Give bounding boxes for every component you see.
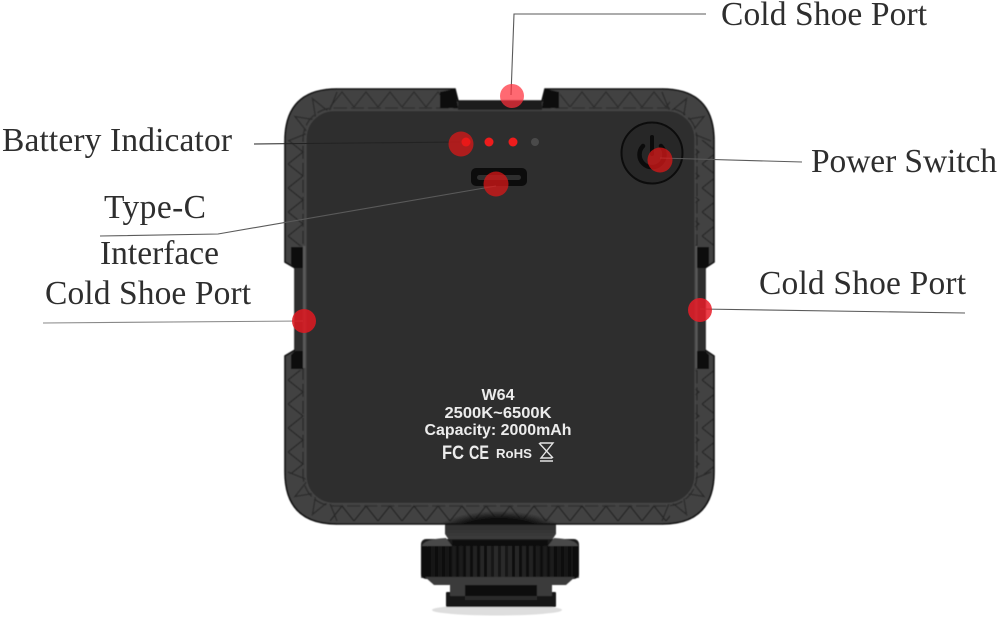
printed specs: FC xyxy=(442,443,464,464)
rim texture xyxy=(287,91,713,523)
Type-C socket xyxy=(471,168,527,186)
leader line: power switch xyxy=(660,158,802,162)
leader line: right cold shoe xyxy=(700,309,965,313)
leader line: battery indicator xyxy=(254,142,460,144)
label: left cold shoe: Cold Shoe Port xyxy=(45,275,252,312)
label: right cold shoe: Cold Shoe Port xyxy=(759,265,967,302)
power button xyxy=(622,122,682,184)
marker: battery indicator xyxy=(448,132,474,156)
marker: Type-C xyxy=(484,172,508,196)
leader line: top cold shoe xyxy=(511,14,706,95)
light body xyxy=(285,89,714,616)
printed specs: Capacity: 2000mAh xyxy=(424,422,572,439)
marker: top cold shoe xyxy=(500,84,524,108)
label: Type-C: Type-C xyxy=(104,189,206,226)
mount shadow xyxy=(444,512,554,524)
main back panel xyxy=(306,110,695,504)
marker: right cold shoe xyxy=(688,298,712,322)
label: Interface: Interface xyxy=(100,235,219,272)
label: power switch: Power Switch xyxy=(811,143,997,180)
leader line: left cold shoe xyxy=(43,321,303,323)
leader line: Type-C xyxy=(100,186,496,236)
marker: left cold shoe xyxy=(292,309,316,333)
hot shoe mount xyxy=(421,522,579,616)
rubber housing xyxy=(285,89,714,524)
label: battery indicator: Battery Indicator xyxy=(2,122,232,159)
indicator LEDs xyxy=(462,138,539,146)
printed specs xyxy=(424,387,572,464)
side channel strips xyxy=(295,246,705,368)
side port slots xyxy=(291,247,709,369)
printed specs: 2500K~6500K xyxy=(444,405,552,422)
marker: power switch xyxy=(648,148,672,172)
printed specs: CE xyxy=(469,443,489,464)
printed specs: RoHS xyxy=(496,447,532,461)
printed specs: W64 xyxy=(482,387,515,404)
top port slots xyxy=(440,89,559,110)
